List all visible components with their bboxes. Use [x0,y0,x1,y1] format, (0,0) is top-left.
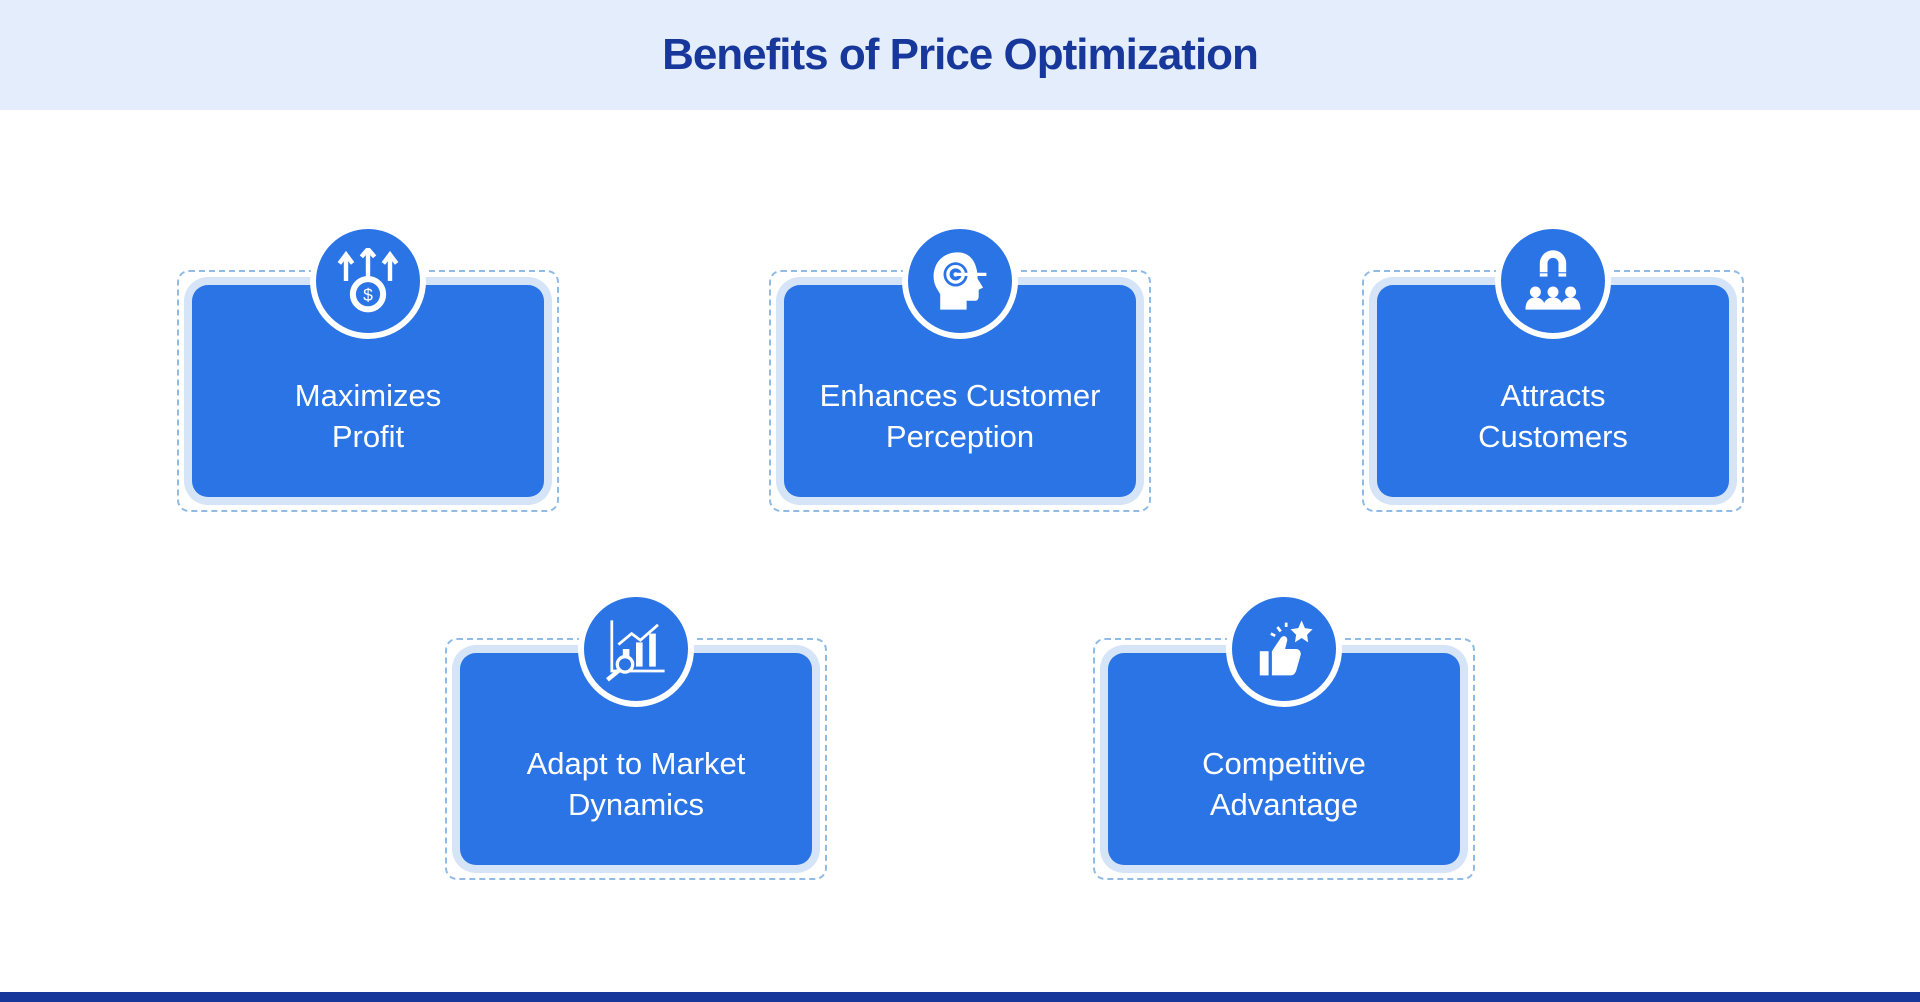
icon: magnet with people [1495,223,1611,339]
label: Maximizes [295,378,441,413]
label: Enhances Customer [820,378,1100,413]
card: competitive advantage [1093,597,1475,880]
label: Attracts [1500,378,1606,413]
label [820,378,1100,454]
footer bar [0,992,1920,1002]
label: Customers [1478,419,1628,454]
card: maximizes profit [177,229,559,512]
label: Adapt to Market [527,746,745,781]
label: Profit [332,419,404,454]
icon: thumbs up with star [1226,591,1342,707]
title: Benefits of Price Optimization [662,30,1258,79]
header band [0,0,1920,110]
label: Dynamics [568,787,704,822]
card: enhances customer perception [769,229,1151,512]
label: Competitive [1202,746,1366,781]
icon: chart with magnifier [578,591,694,707]
card: attracts customers [1362,229,1744,512]
icon: gear with dollar and arrows: $ [363,285,373,305]
label: Perception [886,419,1034,454]
card: adapt to market dynamics [445,597,827,880]
label [295,378,441,454]
icon: gear with dollar and arrows [310,223,426,339]
label [1478,378,1628,454]
label [1202,746,1366,822]
label [526,746,746,822]
label: Advantage [1210,787,1358,822]
icon: head with target [902,223,1018,339]
